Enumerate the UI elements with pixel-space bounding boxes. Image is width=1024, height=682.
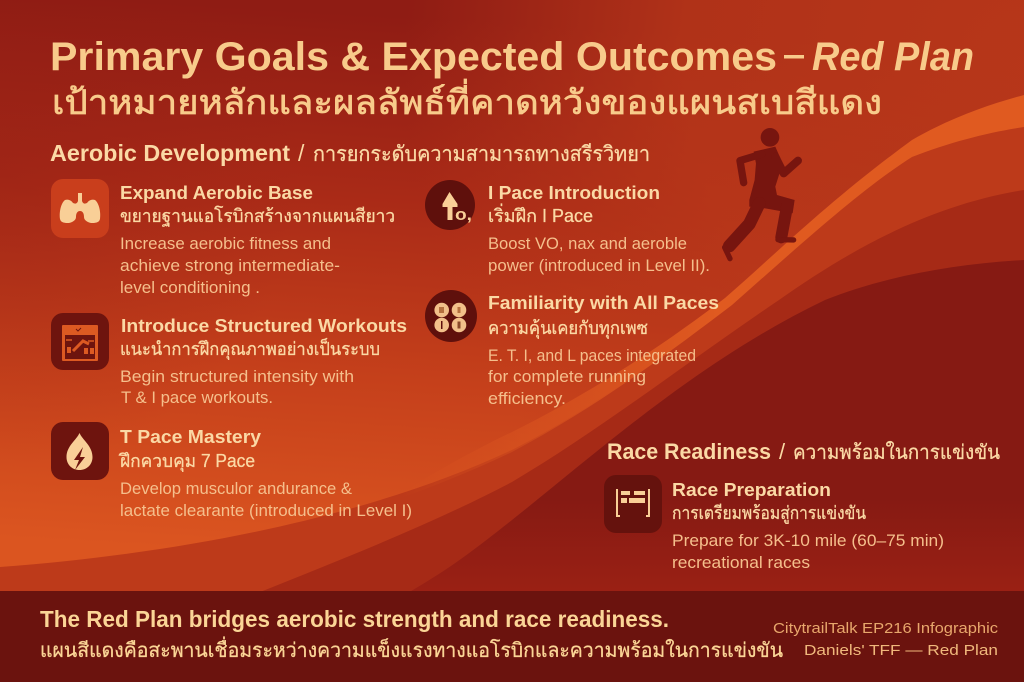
icon: flame drop	[51, 422, 109, 480]
icon: finish line	[604, 475, 662, 533]
item: familiarity with all paces	[425, 290, 719, 408]
item: t pace mastery: ฝึกควบคุม 7 Pace	[119, 451, 255, 472]
item: i pace introduction: power (introduced in Level II).	[488, 256, 710, 275]
item: familiarity with all paces: ความคุ้นเคยกับทุกเพซ	[488, 318, 648, 339]
item: expand aerobic base: level conditioning .	[120, 278, 260, 297]
heading: race readiness	[607, 439, 1000, 464]
item: i pace introduction	[425, 180, 710, 275]
item: expand aerobic base: Expand Aerobic Base	[120, 182, 313, 203]
icon: workout calendar	[51, 313, 109, 370]
item: i pace introduction: Boost VO, nax and aeroble	[488, 234, 687, 253]
item: race preparation	[604, 475, 944, 572]
heading: race readiness: ความพร้อมในการแข่งขัน	[793, 441, 1000, 464]
item: t pace mastery: Develop musculor andurance &	[120, 479, 353, 498]
footer message: แผนสีแดงคือสะพานเชื่อมระหว่างความแข็งแรงทางแอโรบิกและความพร้อมในการแข่งขัน	[40, 636, 783, 662]
item: race preparation: Prepare for 3K-10 mile (60–75 min)	[672, 531, 944, 550]
footer credit: Daniels' TFF — Red Plan	[804, 642, 998, 659]
item: expand aerobic base	[51, 179, 395, 297]
icon: lungs	[51, 179, 109, 238]
item: expand aerobic base: ขยายฐานแอโรบิกสร้างจากแผนสียาว	[120, 205, 395, 227]
heading: aerobic development: Aerobic Development	[50, 140, 290, 166]
title: Primary Goals & Expected Outcomes	[50, 35, 777, 79]
heading: aerobic development: การยกระดับความสามารถทางสรีรวิทยา	[313, 143, 650, 166]
item: race preparation: Race Preparation	[672, 479, 831, 500]
item: t pace mastery: T Pace Mastery	[120, 426, 262, 447]
icon: vo2 arrow: o,	[455, 205, 472, 224]
footer message: The Red Plan bridges aerobic strength and race readiness.	[40, 606, 669, 632]
icon: vo2 arrow	[425, 180, 475, 230]
icon: runner silhouette	[725, 128, 798, 259]
item: expand aerobic base: Increase aerobic fitness and	[120, 234, 331, 253]
item: introduce structured workouts	[51, 313, 407, 407]
heading: aerobic development: /	[298, 140, 305, 166]
item: race preparation: การเตรียมพร้อมสู่การแข่งขัน	[672, 503, 866, 524]
item: introduce structured workouts: แนะนำการฝึกคุณภาพอย่างเป็นระบบ	[120, 337, 380, 360]
heading: race readiness: /	[779, 439, 786, 464]
item: i pace introduction: เริ่มฝึก I Pace	[488, 203, 593, 226]
icon: four pace circles	[425, 290, 477, 342]
item: race preparation: recreational races	[672, 553, 810, 572]
item: expand aerobic base: achieve strong intermediate-	[120, 256, 340, 275]
item: familiarity with all paces: for complete running	[488, 367, 646, 386]
item: familiarity with all paces: E. T. I, and L paces integrated	[488, 346, 696, 365]
heading: race readiness: Race Readiness	[607, 439, 771, 464]
item: t pace mastery: lactate clearante (introduced in Level I)	[120, 501, 412, 520]
item: i pace introduction: I Pace Introduction	[488, 182, 660, 203]
title: Red Plan	[812, 35, 974, 79]
item: familiarity with all paces: efficiency.	[488, 389, 566, 408]
thai title: เป้าหมายหลักและผลลัพธ์ที่คาดหวังของแผนสเบสีแดง	[52, 79, 882, 122]
heading: aerobic development	[50, 140, 650, 166]
item: introduce structured workouts: Begin structured intensity with	[120, 367, 354, 386]
item: t pace mastery	[51, 422, 412, 520]
item: introduce structured workouts: Introduce Structured Workouts	[121, 315, 407, 336]
item: familiarity with all paces: Familiarity with All Paces	[488, 292, 719, 313]
footer credit	[773, 620, 999, 659]
footer band	[0, 591, 1024, 682]
footer credit: CitytrailTalk EP216 Infographic	[773, 620, 999, 637]
footer message	[40, 606, 783, 662]
item: introduce structured workouts: T & I pace workouts.	[121, 388, 273, 407]
